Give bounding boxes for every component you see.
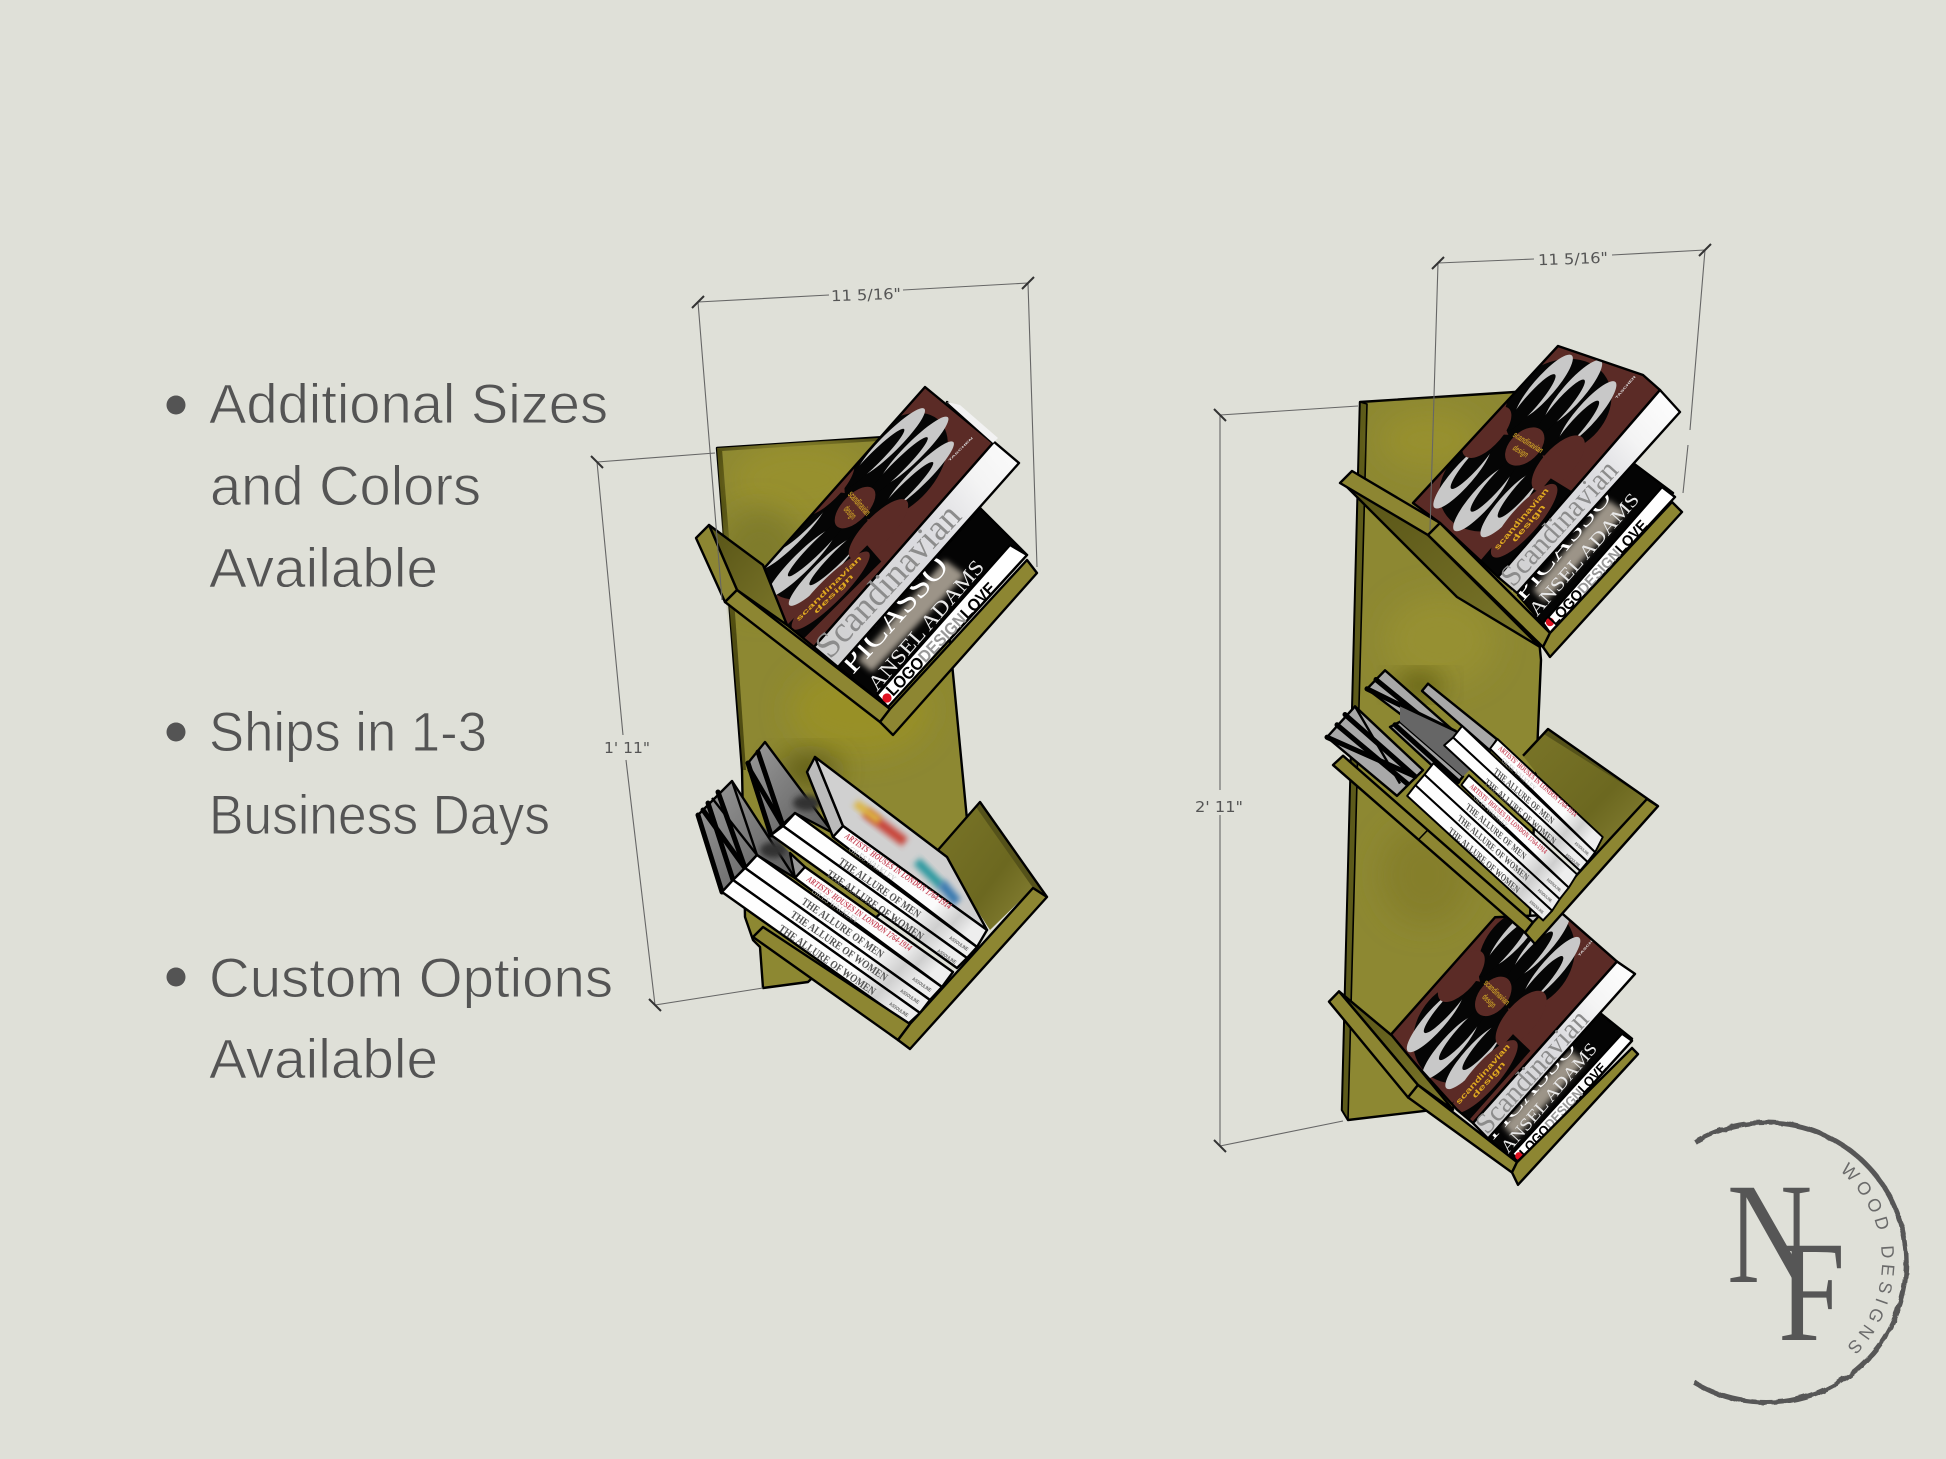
book cover art: scandinavian — [795, 554, 863, 623]
bottom shelf books: design titles: ANSEL ADAMS — [1497, 1039, 1601, 1157]
black lower books — [1488, 1013, 1632, 1162]
book spines: ARTISTS' HOUSES IN LONDON 1764-1914 — [1468, 781, 1549, 856]
bullet: shipping time: Ships in 1-3 — [209, 700, 487, 763]
bullet: additional sizes: Additional Sizes — [209, 372, 608, 435]
label: height: 1' 11" — [604, 739, 650, 757]
book spines: ASSOULINE — [1546, 877, 1562, 893]
book spines — [1405, 724, 1604, 922]
dimensions: three-shelf unit — [1195, 244, 1711, 1152]
top shelf wood back — [1345, 485, 1540, 647]
book spines: ASSOULINE — [911, 976, 933, 994]
middle shelf books: allure titles — [1327, 670, 1604, 922]
top shelf books: design titles: LOGODESIGNLOVE — [1545, 517, 1651, 629]
label: width: 11 5/16" — [831, 285, 901, 305]
book spines: THE ALLURE OF MEN — [799, 896, 886, 961]
bottom shelf books: design titles: PICASSO — [1481, 1036, 1580, 1144]
book spines: ASSOULINE — [899, 988, 921, 1006]
bullet: custom options: Available — [209, 1027, 438, 1090]
shelf 2 books: allure titles — [698, 742, 987, 1024]
book spines: GILES WALKLEY — [1472, 794, 1509, 830]
middle shelf wood front — [1333, 756, 1658, 944]
backboard — [1342, 392, 1541, 1120]
book spines: THE ALLURE OF WOMEN — [788, 909, 890, 984]
dimensions: two-shelf unit — [591, 277, 1037, 1011]
book spines: ARTISTS' HOUSES IN LONDON 1764-1914 — [1497, 743, 1579, 819]
monogram N: N — [1727, 1155, 1812, 1314]
book cover art: TASCHEN — [1577, 933, 1600, 957]
book spines: GILES WALKLEY — [847, 845, 898, 883]
book spines: THE ALLURE OF WOMEN — [1456, 813, 1531, 883]
bottom shelf wood — [1329, 991, 1638, 1185]
book spines: ARTISTS' HOUSES IN LONDON 1764-1914 — [843, 830, 954, 911]
top shelf books: design titles: ANSEL ADAMS — [1525, 489, 1644, 620]
book cover art: scandinavian — [846, 488, 873, 518]
shelf 1 books: design titles: PICASSO — [831, 548, 955, 680]
monogram F: F — [1778, 1212, 1845, 1371]
bottom shelf books: design titles: LOGODESIGNLOVE — [1516, 1060, 1609, 1160]
shelf 1 books: design titles: LOGODESIGNLOVE — [882, 579, 1000, 700]
lower shelves group — [1327, 670, 1667, 1185]
book covers edge-on — [1327, 670, 1497, 796]
book spines: ASSOULINE — [948, 935, 970, 953]
book cover art: design — [1471, 1060, 1507, 1100]
shelf 1 books: design titles: Scandinavian — [807, 496, 969, 665]
black lower books — [1518, 463, 1673, 632]
shelf 2 wood front — [753, 888, 1047, 1049]
book spines: THE ALLURE OF WOMEN — [1447, 825, 1522, 896]
bottom shelf books: design titles: Scandinavian — [1470, 1004, 1595, 1140]
logo design love strip — [1512, 1034, 1632, 1162]
top shelf books: design titles: Scandinavian — [1494, 454, 1625, 593]
shelf 2 wood back — [938, 802, 1047, 930]
book cover art: design — [1480, 991, 1499, 1010]
book cover art — [1392, 916, 1616, 1122]
book spines: ASSOULINE — [1565, 852, 1581, 868]
feature list — [166, 372, 613, 1090]
book spines: THE ALLURE OF WOMEN — [776, 923, 878, 998]
book cover art: design — [1510, 503, 1548, 544]
white book spine — [1473, 962, 1635, 1139]
book cover art: scandinavian — [1492, 487, 1551, 551]
book spines: THE ALLURE OF WOMEN — [1483, 776, 1558, 847]
book spines: ASSOULINE — [888, 1001, 910, 1019]
logo design love strip — [877, 545, 1027, 707]
book spines: ASSOULINE — [1529, 899, 1545, 915]
bottom shelf books: design titles — [1390, 914, 1636, 1160]
book spines: ASSOULINE — [1537, 887, 1553, 904]
book cover art: scandinavian — [1482, 977, 1512, 1008]
book cover art: scandinavian — [1510, 430, 1546, 455]
book spines: THE ALLURE OF MEN — [1464, 801, 1528, 862]
bullet: additional sizes: Available — [209, 536, 438, 599]
label: height: 2' 11" — [1195, 798, 1243, 816]
shelf 1 books: design titles: ANSEL ADAMS — [863, 555, 989, 695]
brush circle — [1695, 1122, 1906, 1402]
bullet: additional sizes — [166, 372, 608, 599]
bullet: shipping time: Business Days — [209, 783, 550, 846]
book cover art: TASCHEN — [1615, 375, 1637, 400]
book spines: THE ALLURE OF WOMEN — [824, 868, 926, 943]
book cover art: design — [1510, 443, 1532, 460]
label: width: 11 5/16" — [1538, 249, 1608, 269]
white book spine — [1498, 390, 1680, 593]
book spines: GILES WALKLEY — [810, 887, 861, 925]
black lower books — [838, 508, 1027, 707]
three-shelf unit — [1327, 276, 1711, 1185]
book spines: ARTISTS' HOUSES IN LONDON 1764-1914 — [805, 873, 914, 953]
book spines: GILES WALKLEY — [1500, 757, 1537, 793]
bullet: additional sizes: and Colors — [210, 454, 481, 517]
bullet: custom options: Custom Options — [209, 946, 613, 1009]
white book spine — [814, 402, 1019, 667]
book cover art — [766, 388, 992, 646]
book spines: ASSOULINE — [936, 948, 958, 966]
book spines: ASSOULINE — [1574, 840, 1590, 857]
shelf 1 wood — [696, 525, 1037, 735]
bullet: shipping time — [166, 700, 550, 846]
book cover art — [1414, 348, 1658, 576]
book spines: THE ALLURE OF MEN — [1492, 766, 1556, 827]
logo design love strip — [1543, 487, 1675, 633]
shelf 1 books: design titles — [764, 386, 1028, 707]
book cover art: scandinavian — [1455, 1043, 1512, 1106]
logo: NF Wood Designs — [1693, 1120, 1910, 1406]
bullet: custom options — [166, 946, 613, 1090]
backboard — [717, 434, 968, 988]
book cover art: design — [812, 572, 855, 615]
book spines — [722, 813, 987, 1024]
two-shelf unit — [689, 322, 1047, 1049]
middle shelf wood back — [1523, 729, 1658, 856]
book cover art: design — [841, 503, 859, 522]
top shelf books: design titles: PICASSO — [1508, 484, 1617, 606]
top shelf wood front — [1340, 471, 1682, 657]
book cover art: TASCHEN — [948, 436, 974, 462]
top shelf books: design titles — [1412, 344, 1682, 632]
book spines: THE ALLURE OF MEN — [836, 856, 923, 921]
book covers seen from above — [698, 742, 987, 930]
curved brand text: WOOD DESIGNS — [1842, 1162, 1894, 1354]
